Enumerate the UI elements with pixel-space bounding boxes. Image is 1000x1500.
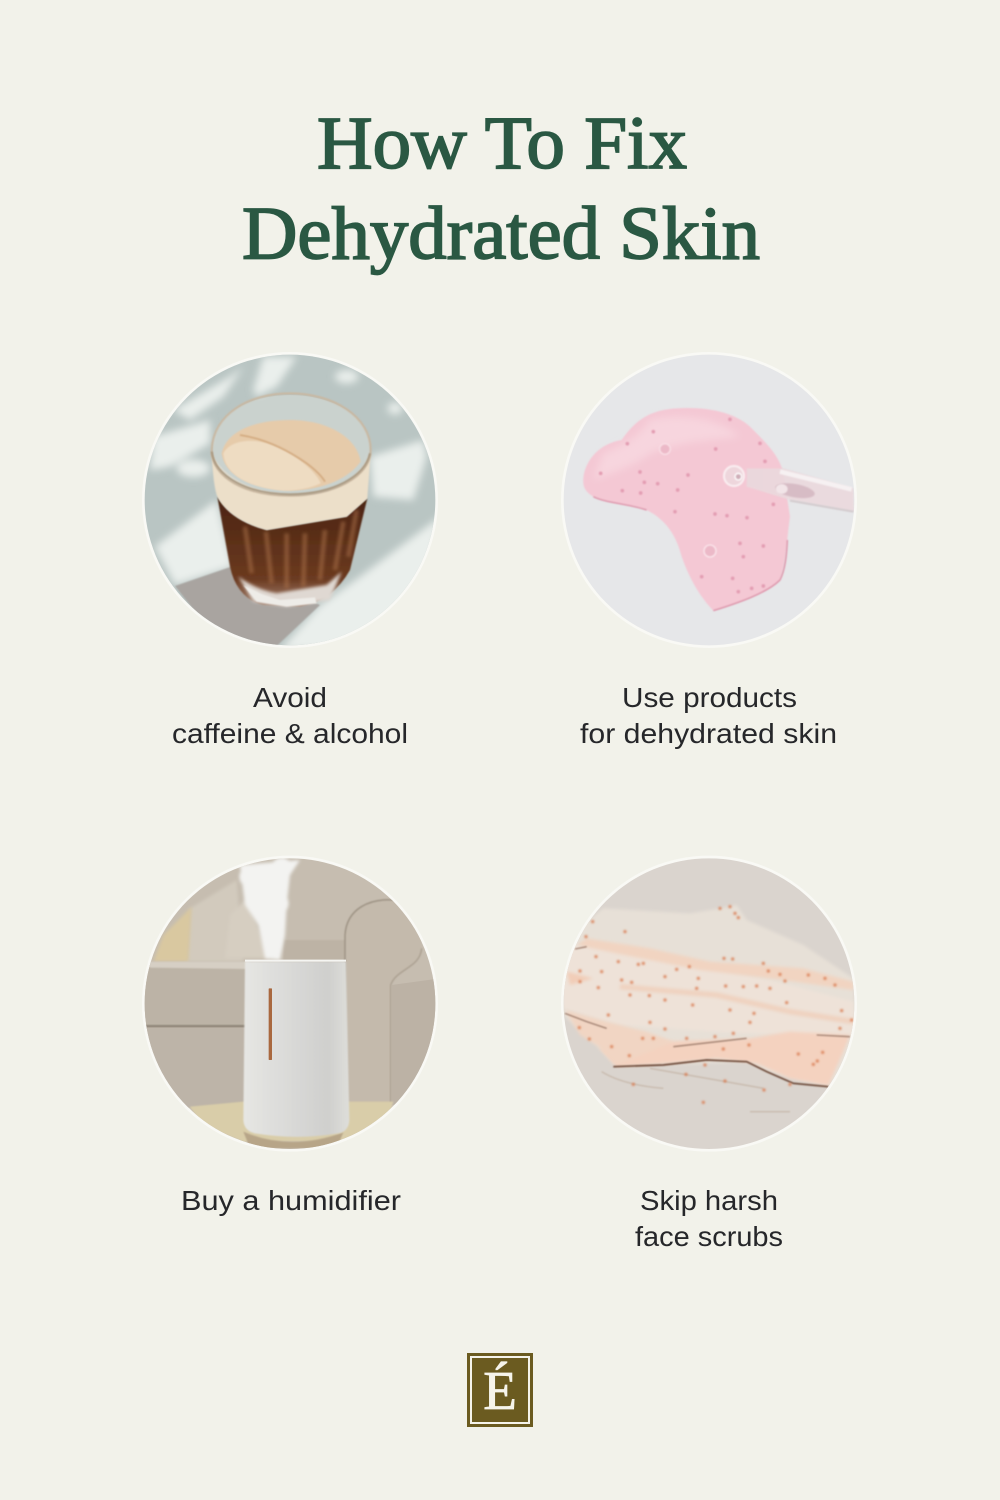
label: skip harsh face scrubs: face scrubs [635, 1221, 783, 1252]
glass contents [217, 497, 367, 607]
photo: pink serum with dropper [561, 352, 857, 648]
label: buy a humidifier: Buy a humidifier [181, 1185, 401, 1216]
photo: white humidifier on sofa background [142, 856, 438, 1152]
title [242, 102, 760, 276]
photo: exfoliating scrub smear [561, 856, 857, 1152]
title: Dehydrated Skin [242, 192, 760, 276]
label: use products for dehydrated skin: Use products [622, 682, 797, 713]
logo: brand mark [467, 1353, 533, 1427]
photo: iced coffee glass [142, 352, 438, 648]
panel: use products for dehydrated skin [561, 352, 857, 749]
label: avoid caffeine and alcohol: Avoid [253, 682, 327, 713]
label: avoid caffeine and alcohol [172, 682, 408, 749]
title: How To Fix [317, 102, 687, 185]
panel: avoid caffeine and alcohol [142, 352, 438, 744]
label: avoid caffeine and alcohol: caffeine & alcohol [172, 718, 408, 749]
panel: buy a humidifier [142, 856, 438, 1216]
label: use products for dehydrated skin [580, 682, 837, 749]
label: use products for dehydrated skin: for dehydrated skin [580, 718, 837, 749]
label: skip harsh face scrubs: Skip harsh [640, 1185, 778, 1216]
logo: brand mark: É [483, 1360, 517, 1421]
panel: skip harsh face scrubs [561, 856, 857, 1246]
label: skip harsh face scrubs [635, 1185, 783, 1252]
